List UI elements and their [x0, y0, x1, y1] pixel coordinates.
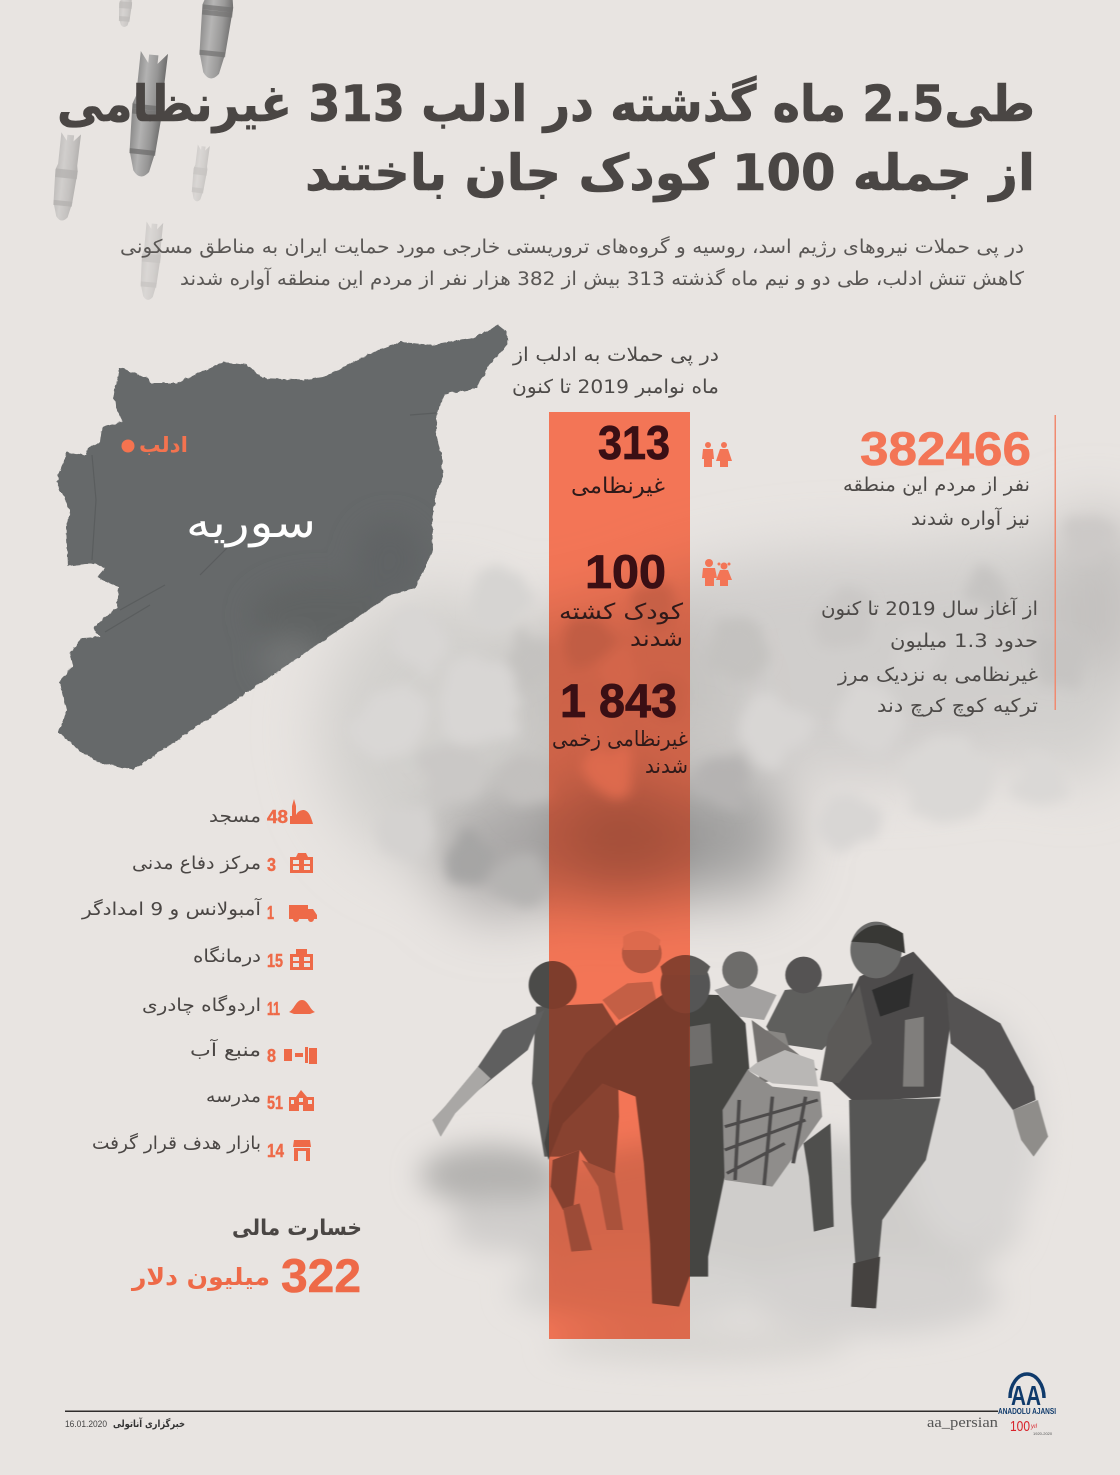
financial loss — [131, 1216, 362, 1302]
row: markets: 14 — [267, 1141, 284, 1161]
orange vertical rule — [1054, 415, 1056, 710]
list: targets hit — [81, 799, 317, 1161]
logo: Anadolu Ajansi: yıl — [1030, 1424, 1038, 1430]
row: schools — [206, 1086, 314, 1113]
bar caption — [512, 344, 719, 398]
label: Idlib: ادلب — [139, 433, 188, 457]
stat: civilians killed — [571, 416, 670, 499]
logo: Anadolu Ajansi: ANADOLU AJANSI — [998, 1406, 1056, 1416]
stat: displaced: نفر از مردم این منطقه — [843, 474, 1030, 496]
row: ambulance: آمبولانس و 9 امدادگر — [81, 897, 262, 920]
migration text: حدود 1.3 میلیون — [890, 630, 1038, 652]
title: از جمله 100 کودک جان باختند — [305, 144, 1035, 203]
row: civil defence — [132, 853, 313, 875]
stat: displaced — [843, 422, 1031, 530]
row: mosques: 48 — [267, 807, 288, 827]
footer — [65, 1410, 999, 1431]
icon: man and woman — [702, 442, 732, 467]
stat: displaced: نیز آواره شدند — [911, 506, 1030, 530]
map of Syria — [56, 325, 508, 770]
smoke and rescuers photo — [320, 510, 1120, 1363]
row: mosques — [209, 799, 313, 827]
row: clinics: درمانگاه — [193, 945, 261, 967]
row: tent camps — [142, 994, 315, 1019]
row: civil defence: 3 — [267, 855, 276, 875]
row: ambulance — [81, 897, 317, 923]
row: tent camps: 11 — [267, 999, 280, 1019]
stat: civilians wounded: 1 843 — [560, 674, 677, 727]
orange bar — [549, 412, 690, 1339]
intro text — [120, 235, 1025, 290]
bar tint — [549, 412, 690, 1339]
bar photo overlay — [549, 553, 690, 1339]
falling bombs — [50, 0, 239, 301]
title — [57, 75, 1035, 203]
stat: displaced: 382466 — [860, 422, 1031, 475]
icon: boy and girl — [702, 559, 732, 586]
row: water sources: 8 — [267, 1046, 276, 1066]
row: mosques: مسجد — [209, 806, 261, 827]
financial loss: میلیون دلار — [131, 1263, 270, 1291]
row: markets — [92, 1132, 311, 1161]
stat: civilians killed: غیرنظامی — [571, 474, 665, 499]
stat: children killed: شدند — [630, 627, 683, 652]
label: Syria: سوریه — [186, 498, 316, 548]
stat: civilians killed: 313 — [598, 416, 670, 469]
title: طی2.5 ماه گذشته در ادلب 313 غیرنظامی — [57, 75, 1035, 134]
bar caption: ماه نوامبر 2019 تا کنون — [512, 376, 719, 398]
footer: 16.01.2020 — [65, 1419, 107, 1429]
stat: children killed: 100 — [585, 545, 666, 598]
stat: civilians wounded: شدند — [645, 754, 688, 778]
stat: children killed — [559, 545, 684, 652]
intro text: در پی حملات نیروهای رژیم اسد، روسیه و گروه‌های تروریستی خارجی مورد حمایت ایران به مناطق مسکونی — [120, 235, 1024, 258]
stat: children killed: کودک کشته — [559, 600, 684, 625]
logo: Anadolu Ajansi: AA — [1011, 1380, 1041, 1411]
row: water sources: منبع آب — [190, 1038, 261, 1061]
stat: civilians wounded: غیرنظامی زخمی — [552, 727, 688, 751]
row: civil defence: مرکز دفاع مدنی — [132, 853, 261, 874]
row: tent camps: اردوگاه چادری — [142, 994, 261, 1016]
logo: Anadolu Ajansi — [998, 1374, 1056, 1436]
row: ambulance: 1 — [267, 903, 274, 923]
row: markets: بازار هدف قرار گرفت — [92, 1132, 261, 1154]
footer: aa_persian — [927, 1415, 999, 1431]
row: schools: مدرسه — [206, 1086, 261, 1107]
row: schools: 51 — [267, 1093, 283, 1113]
row: clinics — [193, 945, 313, 971]
migration text — [821, 596, 1038, 717]
row: water sources — [190, 1038, 317, 1066]
logo: Anadolu Ajansi: 100 — [1010, 1418, 1030, 1435]
footer: خبرگزاری آناتولی — [113, 1417, 185, 1430]
bar caption: در پی حملات به ادلب از — [512, 344, 719, 366]
migration text: غیرنظامی به نزدیک مرز — [837, 664, 1038, 686]
migration text: از آغاز سال 2019 تا کنون — [821, 596, 1038, 620]
migration text: ترکیه کوچ کرچ دند — [877, 695, 1038, 717]
financial loss: 322 — [281, 1249, 361, 1302]
row: clinics: 15 — [267, 951, 283, 971]
intro text: کاهش تنش ادلب، طی دو و نیم ماه گذشته 313 بیش از 382 هزار نفر از مردم این منطقه آواره شدند — [180, 266, 1025, 290]
stat: civilians wounded — [552, 674, 688, 778]
financial loss: خسارت مالی — [232, 1216, 362, 1241]
logo: Anadolu Ajansi: 1920-2020 — [1033, 1431, 1053, 1436]
